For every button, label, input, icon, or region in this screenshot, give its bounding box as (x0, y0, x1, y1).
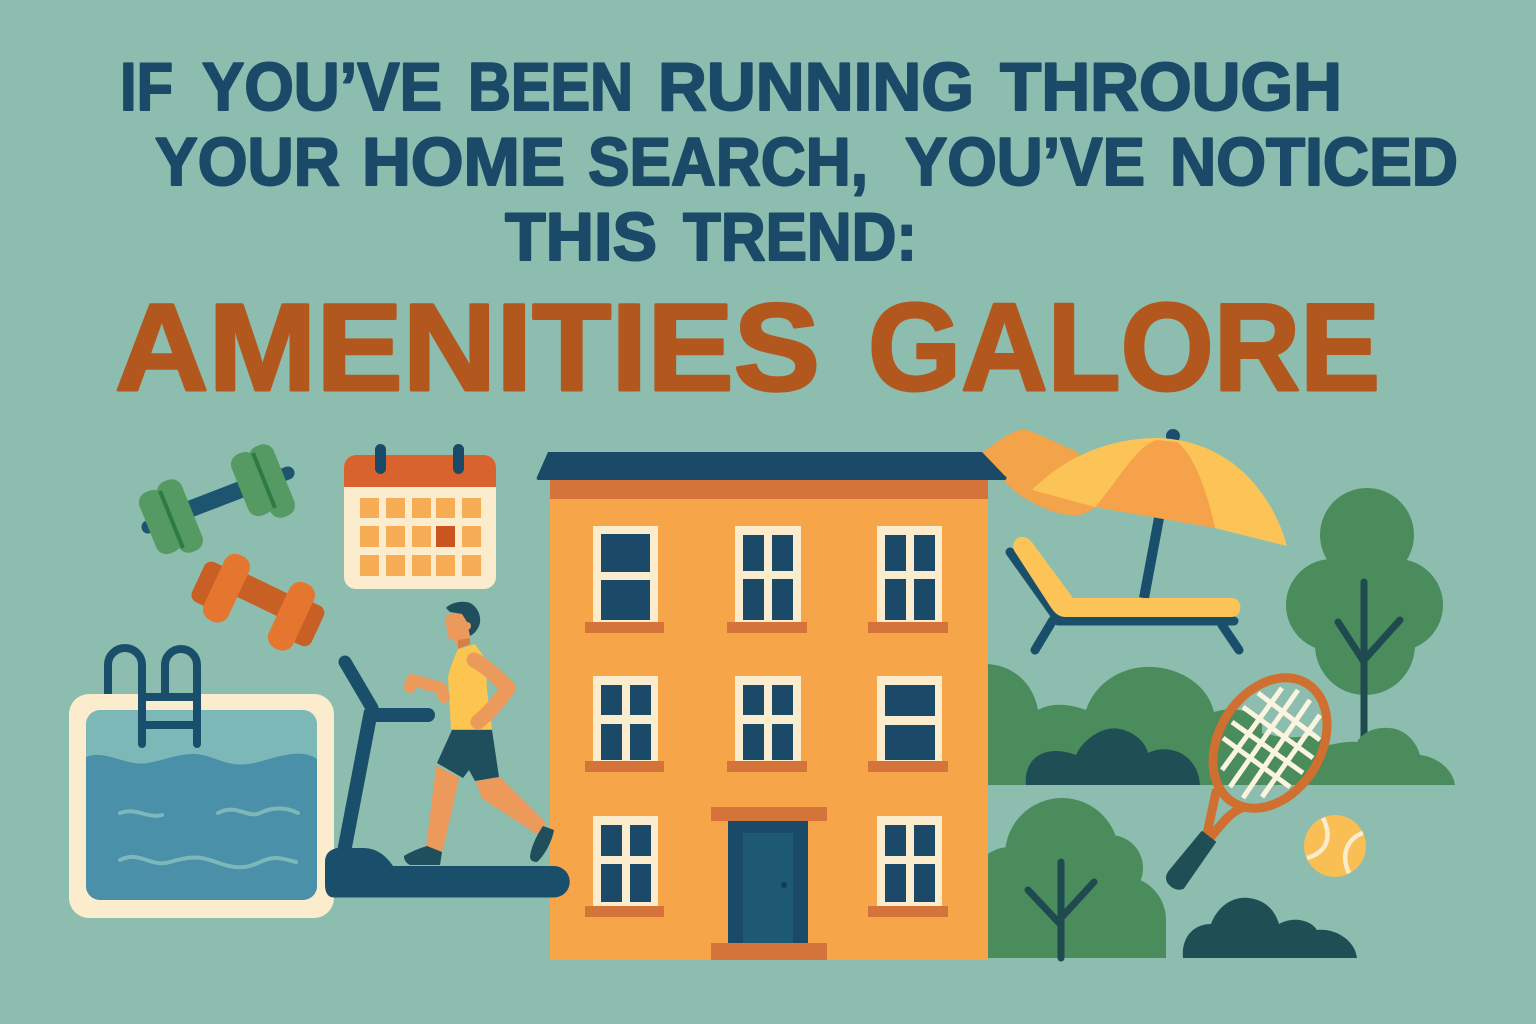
runner front leg (427, 767, 458, 850)
icon: calendar (344, 444, 496, 589)
door (711, 807, 827, 960)
runner shorts (437, 730, 499, 781)
title: intro heading (120, 49, 1458, 275)
title: intro heading: HOME (362, 124, 565, 200)
bush: right ground (1240, 728, 1455, 785)
building fascia (550, 480, 988, 499)
bush: dark lower (1183, 898, 1357, 958)
runner shoes (404, 826, 554, 865)
icon: towel (982, 429, 1095, 515)
runner back leg (477, 778, 545, 833)
icon: tennis racket (1167, 657, 1350, 889)
tree: large right (1286, 488, 1443, 738)
runner arms (474, 660, 508, 722)
figure: runner (404, 602, 554, 865)
tree: lower bush tree (972, 798, 1166, 964)
title: amenities galore (115, 279, 1380, 417)
title: intro heading: BEEN (468, 49, 633, 125)
icon: orange dumbbell (189, 550, 327, 655)
building (537, 452, 1007, 960)
title: intro heading: RUNNING (658, 49, 974, 125)
title: intro heading: YOU’VE (905, 124, 1145, 200)
icon: beach umbrella (1032, 429, 1287, 598)
title: intro heading: YOUR (155, 124, 340, 200)
bushes: behind racket (988, 664, 1262, 785)
runner neck and face (445, 606, 470, 649)
title: intro heading: THROUGH (1000, 49, 1342, 125)
title: intro heading: SEARCH, (588, 124, 868, 200)
title: intro heading: IF (120, 49, 173, 125)
windows (585, 526, 948, 917)
icon: tennis ball (1304, 815, 1366, 877)
title: intro heading: THIS (505, 199, 657, 275)
title: amenities galore: AMENITIES (115, 279, 820, 417)
icon: swimming pool (69, 648, 334, 918)
building wall (550, 480, 988, 960)
building roof (537, 452, 1007, 480)
title: intro heading: TREND: (683, 199, 917, 275)
runner shirt (448, 644, 492, 729)
title: intro heading: YOU’VE (202, 49, 442, 125)
icon: treadmill (325, 662, 570, 898)
icon: green dumbbell (136, 441, 298, 557)
title: intro heading: NOTICED (1170, 124, 1458, 200)
icon: lounge chair (1010, 537, 1240, 650)
title: amenities galore: GALORE (868, 279, 1380, 417)
runner hair (446, 602, 480, 636)
